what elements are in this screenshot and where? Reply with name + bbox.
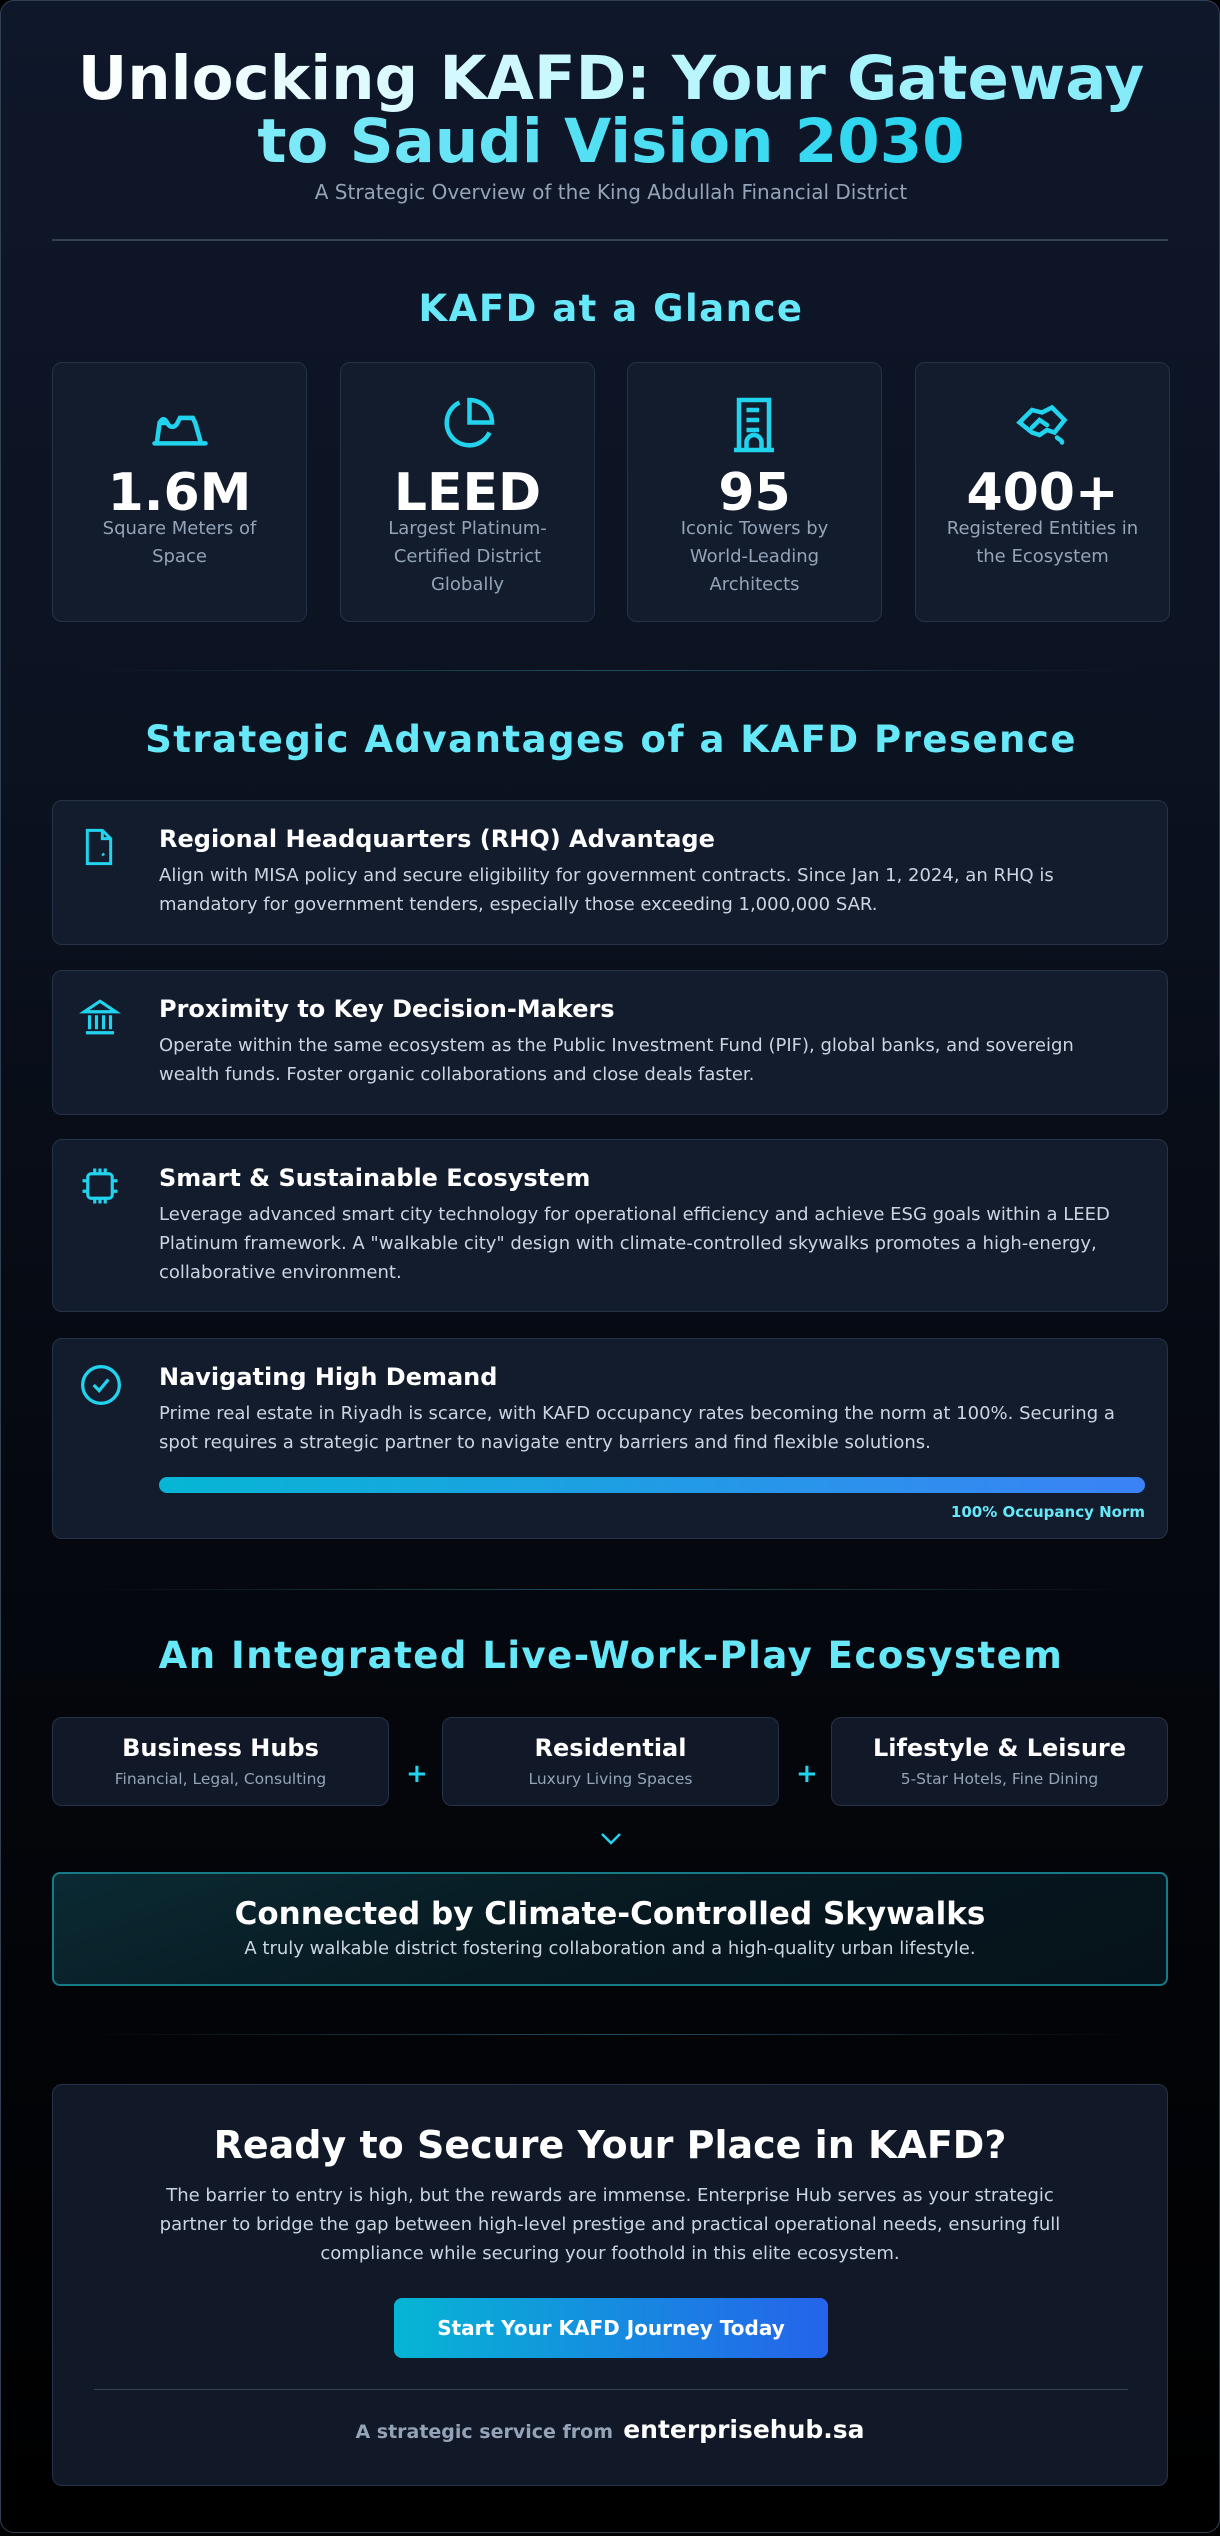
skywalk callout: Connected by Climate-Controlled Skywalks <box>235 1896 985 1932</box>
box: residential <box>442 1717 779 1806</box>
advantage: smart: Smart & Sustainable Ecosystem <box>159 1164 590 1192</box>
box: business hubs <box>52 1717 389 1806</box>
footer credit: A strategic service from enterprisehub.sa <box>355 2415 865 2444</box>
icon: document <box>86 828 112 866</box>
advantage: smart: Leverage advanced smart city technology for operational efficiency and achieve ESG goals within a LEED Platinum framework. A "walkable city" design with climate-controlled skywalks promotes a high-energy, collaborative environment. <box>159 1204 1110 1283</box>
box: lifestyle: 5-Star Hotels, Fine Dining <box>901 1770 1098 1788</box>
heading: glance: KAFD at a Glance <box>419 287 803 330</box>
icon: pie chart <box>444 398 494 448</box>
advantage: demand <box>52 1338 1168 1539</box>
advantage: proximity <box>52 970 1168 1115</box>
stat card: LEED <box>340 362 595 622</box>
CTA heading: Ready to Secure Your Place in KAFD? <box>214 2123 1006 2167</box>
box: lifestyle <box>831 1717 1168 1806</box>
advantage: RHQ: Regional Headquarters (RHQ) Advantage <box>159 825 715 853</box>
title: Unlocking KAFD: Your Gateway <box>78 43 1144 114</box>
arrow: chevron down <box>601 1833 621 1845</box>
stat card: 1.6M <box>52 362 307 622</box>
stat card: 95 <box>627 362 882 622</box>
advantage: proximity: Operate within the same ecosystem as the Public Investment Fund (PIF), global banks, and sovereign wealth funds. Foster organic collaborations and close deals faster. <box>159 1035 1074 1085</box>
stat card: 95: Iconic Towers by World-Leading Architects <box>681 518 828 595</box>
stat card: 400+ <box>915 362 1170 622</box>
advantage: demand: Navigating High Demand <box>159 1363 497 1391</box>
icon: tower <box>734 398 774 452</box>
heading: advantages: Strategic Advantages of a KAFD Presence <box>145 718 1077 761</box>
advantage: smart <box>52 1139 1168 1312</box>
stat card: 95: 95 <box>718 463 791 523</box>
box: business hubs: Financial, Legal, Consulting <box>115 1770 326 1788</box>
CTA button: Start Your KAFD Journey Today <box>437 2316 785 2340</box>
CTA button <box>394 2298 828 2358</box>
box: residential: Residential <box>535 1734 686 1762</box>
heading: ecosystem: An Integrated Live-Work-Play Ecosystem <box>159 1634 1063 1677</box>
stat card: 1.6M: Square Meters of Space <box>103 518 256 567</box>
progress label: 100% Occupancy Norm <box>951 1503 1145 1521</box>
subtitle: A Strategic Overview of the King Abdullah Financial District <box>315 180 907 204</box>
stat card: LEED: LEED <box>394 463 541 523</box>
plus: + <box>406 1759 428 1789</box>
icon: chip <box>82 1168 118 1204</box>
stat card: LEED: Largest Platinum-Certified District Globally <box>388 518 547 595</box>
advantage: RHQ <box>52 800 1168 945</box>
advantage: proximity: Proximity to Key Decision-Makers <box>159 995 615 1023</box>
stat card: 400+: Registered Entities in the Ecosystem <box>947 518 1138 567</box>
icon: handshake <box>1016 404 1068 445</box>
title: to Saudi Vision 2030 <box>257 106 965 177</box>
stat card: 1.6M: 1.6M <box>108 463 251 523</box>
box: residential: Luxury Living Spaces <box>528 1770 692 1788</box>
icon: check circle <box>81 1365 121 1405</box>
icon: bank <box>79 999 121 1034</box>
skywalk callout: A truly walkable district fostering collaboration and a high-quality urban lifestyle. <box>244 1938 976 1959</box>
skywalk callout <box>52 1872 1168 1986</box>
icon: area <box>152 416 208 446</box>
stat card: 400+: 400+ <box>966 463 1119 523</box>
box: lifestyle: Lifestyle & Leisure <box>873 1734 1126 1762</box>
CTA text: The barrier to entry is high, but the rewards are immense. Enterprise Hub serves as your strategic partner to bridge the gap between high-level prestige and practical operational needs, ensuring full compliance while securing your foothold in this elite ecosystem. <box>160 2185 1060 2264</box>
advantage: RHQ: Align with MISA policy and secure eligibility for government contracts. Since Jan 1, 2024, an RHQ is mandatory for government tenders, especially those exceeding 1,000,000 SAR. <box>159 865 1054 915</box>
title <box>78 43 1144 177</box>
progress bar <box>159 1477 1145 1493</box>
box: business hubs: Business Hubs <box>122 1734 319 1762</box>
advantage: demand: Prime real estate in Riyadh is scarce, with KAFD occupancy rates becoming the norm at 100%. Securing a spot requires a strategic partner to navigate entry barriers and find flexible solutions. <box>159 1403 1115 1453</box>
CTA panel <box>52 2084 1168 2486</box>
plus: + <box>796 1759 818 1789</box>
